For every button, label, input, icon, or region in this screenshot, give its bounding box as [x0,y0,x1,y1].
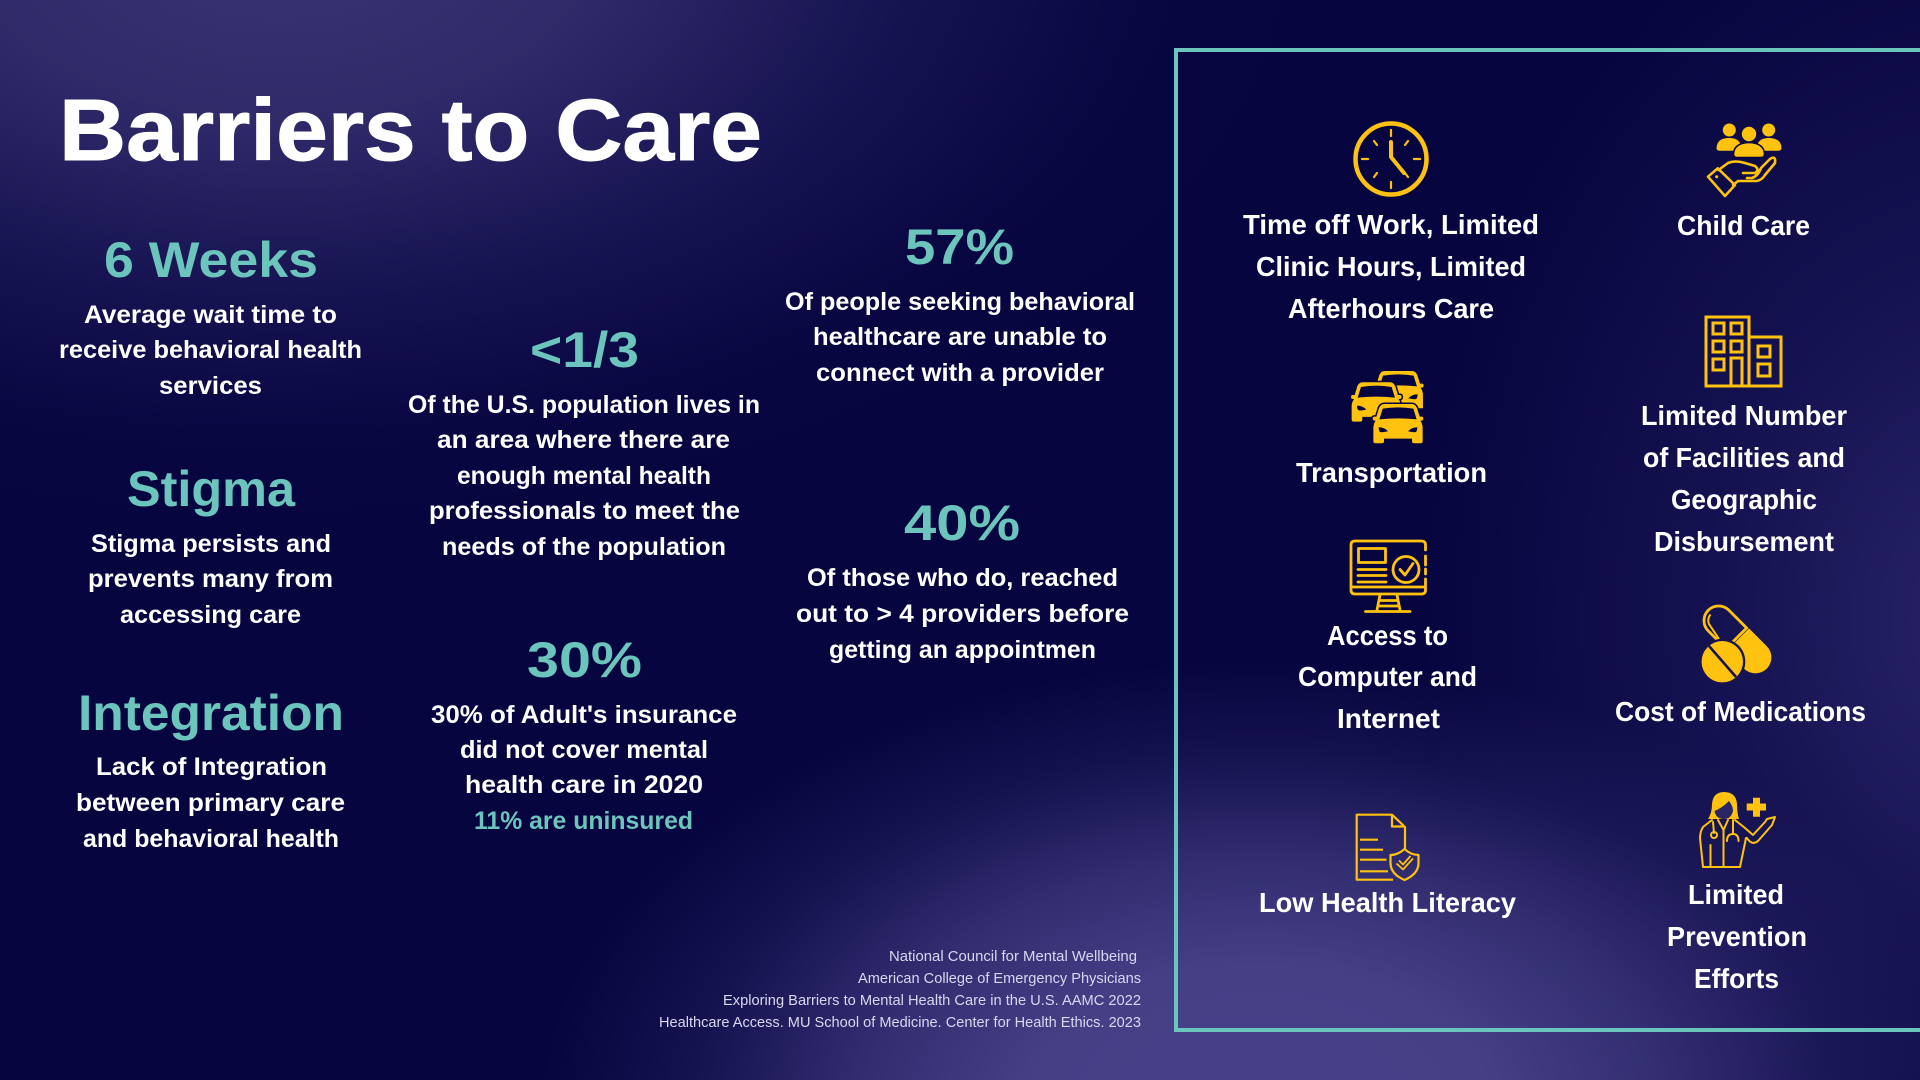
text: stigma persists: Stigma persists and [91,530,331,558]
text: population: an area where there are [437,426,730,454]
label: limited prevention [1667,879,1807,994]
text: insurance: health care in 2020 [465,771,703,799]
stat: integration [76,685,345,853]
icon: clock [1356,124,1426,194]
heading: 30%: 30% [527,632,642,688]
label: computer access [1298,620,1477,734]
text: average wait time [59,301,362,400]
stat: 6 weeks [59,232,362,400]
text: insurance [431,701,737,835]
text: lack of integration [76,753,345,853]
text: unable to connect: healthcare are unable to [813,323,1107,351]
label: computer access: Access to [1327,620,1448,651]
label: time off work [1243,209,1539,324]
text: insurance: did not cover mental [460,736,708,764]
text: average wait time: Average wait time to [84,301,337,329]
stat: stigma [88,461,333,629]
heading: 6 weeks: 6 Weeks [104,232,318,288]
heading: integration: Integration [78,685,344,741]
label: limited prevention: Efforts [1694,963,1779,994]
front car [1373,404,1423,443]
text: stigma persists [88,530,333,629]
label: limited prevention: Prevention [1667,921,1807,952]
sources: Healthcare Access. MU School of Medicine. Center for Health Ethics. 2023 [659,1015,1141,1031]
stat: 57 percent [785,219,1135,387]
label: limited facilities: Geographic [1671,484,1817,515]
text: unable to connect: Of people seeking behavioral [785,288,1135,316]
sources: Exploring Barriers to Mental Health Care in the U.S. AAMC 2022 [723,993,1141,1009]
label: transportation: Transportation [1296,457,1487,488]
label: limited facilities: Disbursement [1654,526,1834,557]
icon: pills [1697,599,1778,685]
text: lack of integration: and behavioral health [83,825,339,853]
text: population: needs of the population [442,533,726,561]
text: unable to connect [785,288,1135,387]
sources: National Council for Mental Wellbeing [889,949,1137,965]
sources [659,949,1141,1031]
label: limited prevention: Limited [1688,879,1784,910]
text: reached out: getting an appointmen [829,636,1096,664]
heading: 57%: 57% [905,219,1014,275]
stat: less than one third [408,322,760,561]
text: insurance: 11% are uninsured [474,807,693,835]
text: reached out: out to > 4 providers before [796,600,1129,628]
label: limited facilities: of Facilities and [1643,442,1845,473]
label: low health literacy: Low Health Literacy [1259,887,1516,918]
panel: barriers list [1176,50,1920,1030]
text: population [408,391,760,561]
text: insurance: 30% of Adult's insurance [431,701,737,729]
heading: stigma: Stigma [127,461,296,517]
text: population: Of the U.S. population lives in [408,391,760,419]
text: average wait time: services [159,372,262,400]
icon: child care hand [1708,124,1782,196]
sources: American College of Emergency Physicians [858,971,1141,987]
text: stigma persists: prevents many from [88,565,333,593]
text: population: enough mental health [457,462,711,490]
text: stigma persists: accessing care [120,601,301,629]
label: limited facilities: Limited Number [1641,400,1847,431]
back car [1373,371,1424,408]
icon: doctor [1700,792,1775,867]
text: lack of integration: Lack of Integration [96,753,327,781]
text: average wait time: receive behavioral health [59,336,362,364]
text: reached out [796,564,1129,664]
text: reached out: Of those who do, reached [807,564,1118,592]
label: child care: Child Care [1677,210,1810,241]
icon: document with shield [1357,815,1418,880]
label: time off work: Time off Work, Limited [1243,209,1539,240]
label: time off work: Afterhours Care [1288,293,1494,324]
left car [1351,382,1402,422]
text: lack of integration: between primary care [76,789,345,817]
title: Barriers to Care [59,82,762,179]
text: unable to connect: connect with a provider [816,359,1104,387]
label: computer access: Internet [1337,703,1440,734]
icon: buildings [1706,317,1781,386]
heading: 40%: 40% [904,495,1020,551]
heading: less than 1/3: <1/3 [530,322,639,378]
label: cost of medications: Cost of Medications [1615,696,1866,727]
label: computer access: Computer and [1298,661,1477,692]
label: time off work: Clinic Hours, Limited [1256,251,1526,282]
icon: cars [1351,371,1424,443]
label: limited facilities [1641,400,1847,557]
text: population: professionals to meet the [429,497,740,525]
icon: computer [1351,541,1426,612]
stat: 40 percent [796,495,1129,664]
stat: 30 percent [431,632,737,835]
